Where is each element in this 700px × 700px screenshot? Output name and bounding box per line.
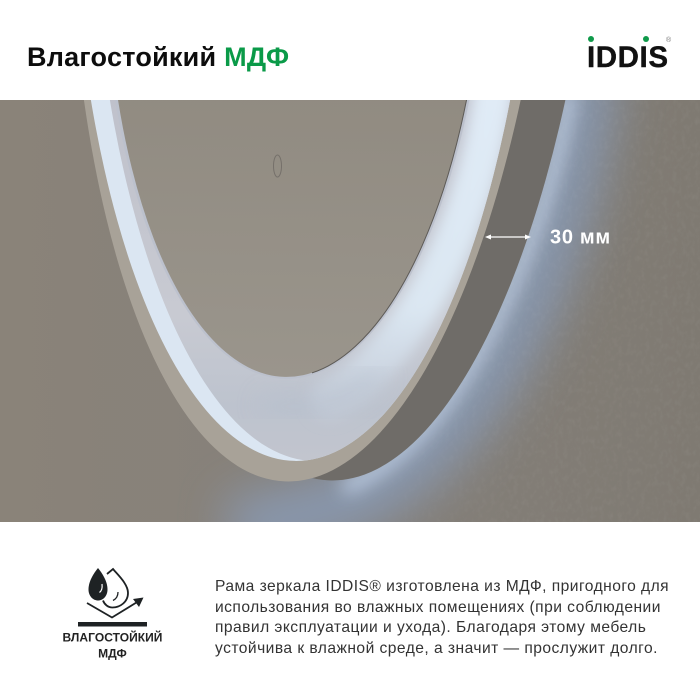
icon: bar (78, 622, 147, 626)
icon: outline drop (103, 569, 128, 608)
inner dished surface (110, 100, 510, 460)
mirror glass (118, 100, 470, 377)
logo: IDDIS: IDDIS (587, 41, 668, 74)
title: Влагостойкий МДФ (27, 42, 289, 72)
dimension arrow (485, 234, 531, 240)
text block: description: Рама зеркала IDDIS® изготовлена из МДФ, пригодного для (215, 578, 669, 595)
text block: description: устойчива к влажной среде, а значит — прослужит долго. (215, 640, 658, 657)
wall (0, 100, 700, 522)
mirror back edge (312, 100, 566, 480)
icon label (63, 630, 162, 660)
dimension label: 30 мм (550, 226, 611, 248)
text block: description: правил эксплуатации и ухода). Благодаря этому мебель (215, 619, 646, 636)
icon: arrow (87, 598, 144, 618)
light band (90, 100, 510, 461)
icon: moisture resistant MDF (63, 568, 162, 660)
frame ring (84, 100, 521, 482)
text block: description: использования во влажных помещениях (при соблюдении (215, 599, 661, 616)
icon: black drop (88, 568, 108, 600)
touch button (274, 155, 282, 177)
logo: IDDIS: ® (666, 36, 672, 44)
photo: mirror on wall (0, 100, 700, 522)
wall glow (209, 100, 644, 522)
icon label: ВЛАГОСТОЙКИЙ (63, 630, 162, 644)
text block: description (215, 578, 669, 657)
icon label: МДФ (98, 646, 127, 660)
